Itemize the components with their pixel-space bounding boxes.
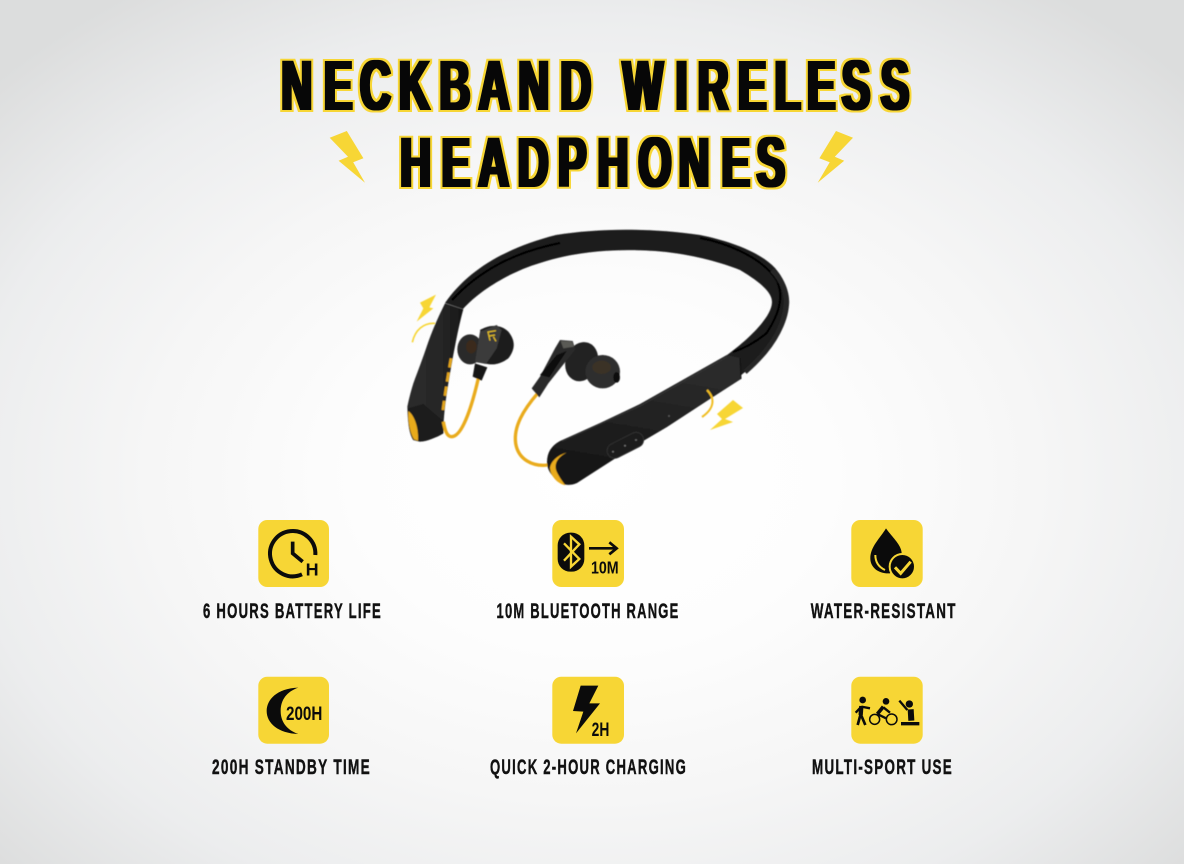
icon: bluetooth range: 10M	[591, 557, 619, 577]
icon: left title lightning bolt	[330, 131, 365, 183]
label: 200H STANDBY TIME	[212, 756, 371, 779]
icon: bluetooth range	[552, 520, 624, 587]
neck band	[445, 230, 789, 380]
right body ridge	[562, 357, 727, 441]
right body	[547, 355, 741, 485]
feature: water-resistant	[811, 520, 957, 623]
right body yellow tip	[550, 453, 567, 485]
feature: quick 2-hour charging	[490, 677, 687, 779]
label: QUICK 2-HOUR CHARGING	[490, 756, 687, 779]
left body yellow marks	[443, 358, 451, 412]
label: 10M BLUETOOTH RANGE	[496, 600, 680, 623]
label: MULTI-SPORT USE	[812, 756, 953, 779]
right signal arc	[702, 390, 712, 417]
icon: moon: 200H	[286, 704, 322, 725]
icon: clock: H	[306, 560, 319, 580]
control button	[605, 430, 646, 461]
left body	[407, 303, 463, 442]
left signal arc	[412, 323, 435, 342]
label: 6 HOURS BATTERY LIFE	[203, 600, 382, 623]
left body yellow tip	[408, 411, 418, 441]
icon: clock	[258, 520, 329, 587]
right earbud	[532, 337, 620, 397]
left cable	[443, 378, 478, 437]
left earbud	[457, 325, 514, 381]
feature: multi-sport use	[812, 677, 953, 779]
icon: bolt: 2H	[592, 720, 609, 741]
title: NECKBANDWIRELESS	[281, 47, 909, 126]
icon: bolt	[552, 677, 624, 744]
right yellow bolt	[710, 400, 743, 430]
mic hole	[668, 415, 670, 417]
title: HEADPHONES	[400, 124, 785, 203]
product image: neckband headphones	[407, 230, 789, 485]
feature: 200h standby time	[212, 677, 371, 779]
band outer rim	[745, 270, 786, 372]
label: WATER-RESISTANT	[811, 600, 957, 623]
icon: water drop with check	[851, 520, 923, 587]
title	[281, 47, 909, 203]
feature: 10m bluetooth range	[496, 520, 680, 623]
icon: athletes	[851, 677, 923, 744]
right body segment joint	[740, 358, 741, 379]
left body dark facet	[408, 404, 444, 442]
icon: moon	[258, 677, 329, 744]
band groove	[452, 238, 780, 352]
right cable	[515, 393, 547, 465]
left yellow bolt	[417, 295, 436, 322]
icon: right title lightning bolt	[818, 131, 853, 183]
feature: 6 hours battery life	[203, 520, 382, 623]
